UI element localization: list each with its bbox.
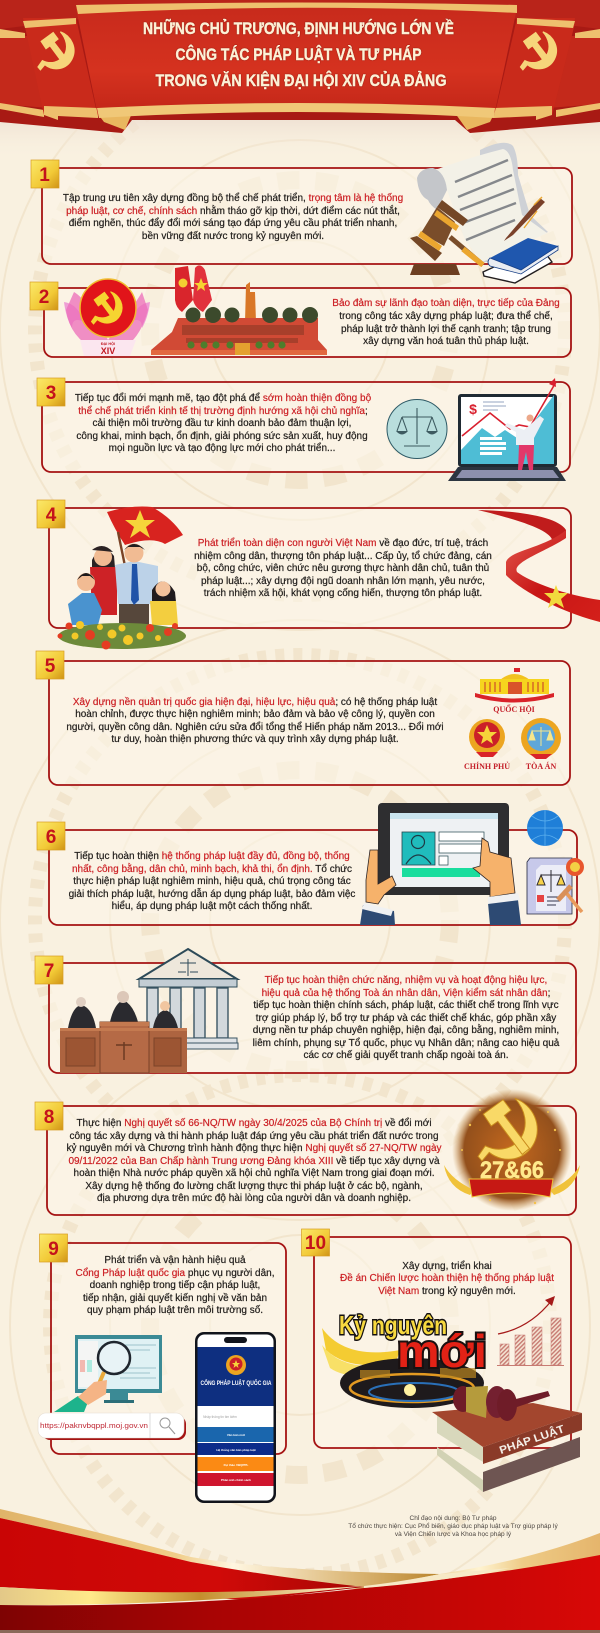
panel 3 frame: [42, 382, 570, 472]
star on ribbon: [544, 585, 568, 608]
badge 7: [35, 956, 63, 984]
panel 7: [35, 949, 576, 1073]
panel 6 frame: [49, 830, 577, 925]
phone: Hệ thống văn bản pháp luật: [216, 1448, 256, 1452]
text block 7: Tiếp tục hoàn thiện chức năng, nhiệm vụ và hoạt động hiệu lực,: [265, 974, 547, 986]
text block 9: quy phạm pháp luật trên môi trường số.: [87, 1304, 263, 1316]
text block 4: Phát triển toàn diện con người Việt Nam về đạo đức, trí tuệ, trách: [198, 537, 488, 549]
emblem: Đại hội XIV: XIV: [101, 346, 115, 356]
text block 7: các cơ chế giải quyết tranh chấp ngoài toà án.: [303, 1049, 509, 1061]
credits: [348, 1514, 559, 1538]
text block 6: giải thích pháp luật, hướng dẫn áp dụng pháp luật, bảo đảm việc: [69, 887, 355, 900]
panel 2 frame: [44, 288, 571, 357]
panel 7 frame: [49, 963, 576, 1073]
credits: Tổ chức thực hiện: Cục Phổ biến, giáo dục pháp luật và Trợ giúp pháp lý: [348, 1521, 559, 1530]
icon: Chính phủ emblem: [469, 719, 505, 757]
title: NHỮNG CHỦ TRƯƠNG, ĐỊNH HƯỚNG LỚN VỀ: [143, 18, 454, 38]
panel 5: [36, 651, 570, 785]
icon: gavel: [410, 200, 483, 275]
panel 3: [37, 378, 570, 481]
footer red upper: [0, 1518, 364, 1600]
text block 10: Đề án Chiến lược hoàn thiện hệ thống pháp luật: [340, 1272, 554, 1284]
title: [143, 18, 454, 90]
footer swoosh: [0, 1509, 600, 1633]
bottom gold band: [97, 103, 495, 118]
panel 1 frame: [42, 168, 572, 264]
side ribbon gold trims: [23, 18, 575, 120]
header banner: [0, 0, 600, 133]
far ribbon gold edges: [0, 29, 600, 117]
text block 1: điểm nghẽn, thúc đẩy đổi mới sáng tạo đáp ứng yêu cầu phát triển nhanh,: [69, 217, 397, 229]
ribbon: [478, 510, 600, 622]
text block 8: 09/11/2022 của Ban Chấp hành Trung ương Đảng khóa XIII về tiếp tục xây dựng và: [68, 1155, 440, 1167]
text block 8: kỷ nguyên mới và Chương trình hành động thực hiện Nghị quyết số 27-NQ/TW ngày: [66, 1142, 442, 1154]
illustration: monitor with magnifier: [54, 1335, 162, 1412]
icon: legal document: [527, 858, 584, 914]
panel 8 frame: [47, 1106, 576, 1215]
top gold band: [76, 2, 517, 14]
text block 5: hoàn chỉnh, được thực hiện nghiêm minh; bảo đảm và bảo vệ công lý, quyền con: [75, 708, 435, 720]
text block 9: tiếp nhận, giải quyết kiến nghị về văn bản: [83, 1292, 267, 1304]
text block 2: Bảo đảm sự lãnh đạo toàn diện, trực tiếp của Đảng: [332, 297, 560, 309]
search bar: https://paknvbqppl.moj.gov.vn: [40, 1421, 148, 1430]
panel 9: [38, 1234, 286, 1503]
icon: scales circle: [387, 400, 447, 458]
text block 7: trợ giúp pháp lý, bổ trợ tư pháp và các thiết chế khác, góp phần xây: [256, 1012, 556, 1024]
main banner: [76, 4, 517, 116]
icon: hammer and sickle right: [520, 32, 556, 70]
text block 10: Việt Nam trong kỷ nguyên mới.: [378, 1285, 516, 1297]
text block 3: [75, 392, 372, 454]
text block 1: [63, 192, 403, 242]
text block 4: pháp luật...; xây dựng đội ngũ doanh nhân lớn mạnh, yêu nước,: [201, 576, 485, 587]
badge 6: 6: [46, 827, 56, 848]
icon: Quốc hội: [475, 668, 554, 702]
phone: Phản ánh chính sách: [221, 1478, 251, 1482]
emblem: 27 & 66: 27&66: [480, 1157, 544, 1184]
text block 3: thể chế phát triển kinh tế thị trường định hướng xã hội chủ nghĩa;: [78, 405, 368, 417]
illustration: Kỷ nguyên mới: Kỷ nguyên: [339, 1310, 447, 1340]
badge 3: [37, 378, 65, 406]
text block 1: bền vững đất nước trong kỷ nguyên mới.: [142, 230, 324, 242]
footer gold upper band left: [0, 1509, 440, 1590]
chart: rising bars: [497, 1296, 564, 1366]
text block 9: [76, 1254, 274, 1316]
illustration: tablet with hands: [360, 803, 521, 925]
text block 4: [194, 537, 492, 599]
text block 7: hiệu quả của hệ thống Toà án nhân dân, Viện kiểm sát nhân dân;: [262, 987, 550, 999]
text block 3: Tiếp tục đổi mới mạnh mẽ, tạo đột phá để sớm hoàn thiện đồng bộ: [75, 392, 372, 404]
icon: globe: [527, 810, 563, 846]
panel 4 frame: [49, 508, 571, 628]
badge 1: [31, 160, 59, 188]
text block 2: trong công tác xây dựng pháp luật; đưa thể chế,: [339, 310, 553, 322]
badge 6: [37, 822, 65, 850]
text block 4: trách nhiệm xã hội, khát vọng cống hiến, thượng tôn pháp luật.: [204, 587, 482, 599]
phone: Nhập thông tin tìm kiếm: [203, 1415, 237, 1419]
badge 2: [30, 282, 58, 310]
panel 1: [31, 143, 572, 283]
text block 2: pháp luật trở thành lợi thế cạnh tranh; tập trung: [341, 323, 551, 335]
text block 7: tiếp tục hoàn thiện chính sách, pháp luật, các thiết chế trong lĩnh vực: [253, 999, 559, 1011]
text block 9: Phát triển và vận hành hiệu quả: [104, 1254, 246, 1266]
text block 3: cải thiện môi trường đầu tư kinh doanh bảo đảm thuận lợi,: [93, 417, 351, 429]
text block 8: công tác xây dựng và thi hành pháp luật đáp ứng yêu cầu phát triển đất nước trong: [69, 1130, 439, 1142]
panel 10 frame: [314, 1237, 571, 1448]
text block 5: Xây dựng nền quản trị quốc gia hiện đại, hiệu lực, hiệu quả; có hệ thống pháp luật: [73, 696, 437, 708]
illustration: courthouse: [139, 949, 238, 1049]
panel 9 frame: [51, 1243, 286, 1454]
text block 5: người, quyền công dân. Nghiên cứu sửa đổi tổng thể Hiến pháp năm 2013... Đổi mới: [66, 721, 444, 733]
text block 10: [340, 1260, 554, 1297]
icon: Tòa án emblem: [521, 718, 561, 759]
badge 10: 10: [305, 1233, 326, 1254]
text block 8: [66, 1117, 442, 1204]
badge 9: [40, 1234, 68, 1262]
right side ribbon: [494, 18, 575, 118]
panel 5 frame: [49, 661, 570, 785]
badge 10: [302, 1229, 330, 1256]
badge 2: 2: [39, 287, 49, 308]
panel 10: [302, 1229, 582, 1492]
text block 6: Tiếp tục hoàn thiện hệ thống pháp luật đầy đủ, đồng bộ, thống: [74, 850, 350, 862]
badge 8: 8: [44, 1107, 54, 1128]
panel 4: [37, 500, 600, 650]
badge 5: [36, 651, 64, 679]
panel 6: [37, 803, 584, 925]
icon: pen: [504, 197, 545, 241]
search bar: [38, 1413, 186, 1440]
back ribbon band: [0, 0, 600, 133]
emblem: Đại hội XIV: [64, 279, 150, 356]
illustration: family with flag: [58, 507, 186, 650]
illustration: judges at bench: [60, 991, 187, 1073]
illustration: law books with gavel: PHÁP LUẬT: [498, 1422, 566, 1457]
badge 5: 5: [45, 656, 56, 677]
text block 6: thực hiện pháp luật nghiêm minh, hiệu quả, chú trọng công tác: [73, 876, 351, 887]
text block 3: mọi nguồn lực và tạo động lực mới cho phát triển...: [109, 442, 335, 454]
text block 8: địa phương dựa trên mức độ hài lòng của người dân và doanh nghiệp.: [97, 1192, 411, 1204]
badge 4: [37, 500, 65, 528]
footer gold lower band: [0, 1586, 364, 1605]
label: Tòa án: TÒA ÁN: [526, 761, 556, 771]
icon: legal scroll: [417, 143, 548, 262]
text block 8: Xây dựng hệ thống đo lường chất lượng thực thi pháp luật ở các bộ, ngành,: [85, 1180, 423, 1192]
text block 7: dựng nền tư pháp chuyên nghiệp, hiện đại, công bằng, nghiêm minh,: [253, 1023, 559, 1036]
text block 8: hoàn thiện Nhà nước pháp quyền xã hội chủ nghĩa Việt Nam trong giai đoạn mới.: [74, 1167, 434, 1179]
text block 4: bộ, công chức, viên chức nêu gương thực hành dân chủ, tuân thủ: [197, 562, 489, 574]
text block 7: [253, 974, 560, 1061]
text block 9: doanh nghiệp trong tiếp cận pháp luật,: [90, 1279, 260, 1291]
illustration: laptop with rising chart: [448, 378, 566, 481]
left side ribbon: [23, 18, 98, 118]
title: CÔNG TÁC PHÁP LUẬT VÀ TƯ PHÁP: [176, 45, 422, 64]
badge 9: 9: [48, 1239, 59, 1260]
emblem: Đại hội XIV: ĐẠI HỘI: [101, 341, 115, 346]
badge 4: 4: [46, 505, 57, 526]
label: Quốc hội: QUỐC HỘI: [493, 704, 535, 714]
text block 10: Xây dựng, triển khai: [402, 1260, 492, 1272]
illustration: laptop with rising chart: $: [469, 401, 477, 417]
text block 5: [66, 696, 444, 745]
panel 2: [30, 265, 571, 357]
panel 8: [35, 1089, 580, 1215]
text block 1: pháp luật, cơ chế, chính sách nhằm tháo gỡ kịp thời, dứt điểm các nút thắt,: [66, 204, 400, 217]
badge 7: 7: [44, 961, 54, 982]
label: Chính phủ: CHÍNH PHỦ: [464, 761, 510, 771]
illustration: congress hall: [151, 265, 327, 355]
credits: Chỉ đạo nội dung: Bộ Tư pháp: [410, 1514, 497, 1522]
illustration: Kỷ nguyên mới: [322, 1310, 487, 1408]
icon: books: [483, 238, 558, 283]
text block 3: công khai, minh bạch, ổn định, giải phóng sức sản xuất, huy động: [76, 430, 368, 442]
illustration: Kỷ nguyên mới: mới: [397, 1325, 487, 1377]
phone: Dự thảo VBQPPL: [224, 1463, 248, 1467]
phone: CỔNG PHÁP LUẬT QUỐC GIA: [200, 1377, 272, 1387]
ribbon curls: [98, 113, 494, 130]
credits: và Viện Chiến lược và Khoa học pháp lý: [395, 1529, 512, 1538]
text block 5: tư duy, hoàn thiện phương thức và quy trình xây dựng pháp luật.: [111, 734, 399, 745]
phone: [195, 1332, 276, 1503]
text block 1: Tập trung ưu tiên xây dựng đồng bộ thể chế phát triển, trọng tâm là hệ thống: [63, 192, 403, 204]
badge 8: [35, 1102, 63, 1130]
text block 8: Thực hiện Nghị quyết số 66-NQ/TW ngày 30/4/2025 của Bộ Chính trị về đổi mới: [76, 1117, 432, 1129]
text block 6: [69, 850, 355, 912]
text block 9: Cổng Pháp luật quốc gia phục vụ người dân,: [76, 1267, 274, 1279]
text block 2: xây dựng văn hoá tuân thủ pháp luật.: [363, 335, 529, 347]
badge 1: 1: [39, 165, 50, 186]
text block 6: nhất, công bằng, dân chủ, minh bạch, khả thi, ổn định. Tổ chức: [72, 862, 352, 875]
emblem: 27 & 66: [444, 1089, 580, 1211]
icon: hammer and sickle left: [38, 32, 74, 70]
text block 7: liêm chính, phụng sự Tổ quốc, phục vụ Nhân dân; nâng cao hiệu quả: [253, 1037, 560, 1049]
illustration: law books with gavel: [432, 1386, 582, 1492]
footer gold upper band right: [385, 1533, 600, 1588]
phone: Văn bản mới: [227, 1433, 245, 1437]
text block 4: nhiệm công dân, thượng tôn pháp luật... Cấp ủy, tổ chức đảng, cán: [194, 550, 492, 562]
footer red lower: [0, 1555, 600, 1630]
text block 6: hiểu, áp dụng pháp luật một cách thống nhất.: [112, 900, 312, 912]
badge 3: 3: [46, 383, 56, 404]
text block 2: [332, 297, 560, 347]
title: TRONG VĂN KIỆN ĐẠI HỘI XIV CỦA ĐẢNG: [156, 71, 446, 90]
